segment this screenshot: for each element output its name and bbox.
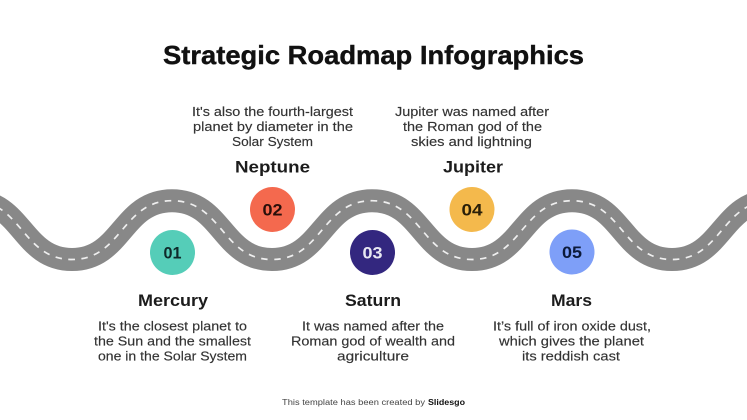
step 02: Neptune	[192, 104, 353, 232]
badge 04: 04	[462, 200, 483, 220]
step 04: Jupiter	[395, 104, 550, 232]
heading Neptune: Neptune	[235, 158, 310, 176]
badge 01	[150, 230, 195, 275]
heading Jupiter: Jupiter	[443, 158, 503, 176]
description Jupiter: Jupiter was named after	[395, 104, 550, 119]
description Saturn: It was named after the	[302, 318, 444, 334]
description Jupiter	[395, 104, 550, 149]
description Neptune: planet by diameter in the	[193, 119, 353, 134]
description Mercury	[94, 318, 251, 364]
description Mars: It’s full of iron oxide dust,	[493, 318, 651, 334]
description Neptune: It's also the fourth-largest	[192, 104, 353, 119]
footer credit: This template has been created by	[282, 398, 425, 407]
description Mars: which gives the planet	[498, 334, 644, 348]
step 01: Mercury	[94, 230, 251, 364]
badge 03: 03	[362, 244, 382, 262]
badge 05: 05	[562, 243, 582, 262]
title: Strategic Roadmap Infographics	[163, 40, 584, 70]
badge 02	[250, 187, 295, 232]
footer credit	[282, 398, 465, 407]
step 05: Mars	[493, 230, 651, 364]
badge 05	[550, 230, 594, 274]
description Mars: its reddish cast	[522, 348, 620, 364]
description Jupiter: the Roman god of the	[403, 119, 542, 134]
description Saturn: agriculture	[337, 348, 409, 364]
badge 03	[350, 230, 395, 275]
description Saturn	[291, 318, 455, 364]
description Saturn: Roman god of wealth and	[291, 334, 455, 348]
footer credit: Slidesgo	[428, 398, 465, 407]
badge 04	[450, 187, 494, 232]
heading Mars: Mars	[551, 291, 592, 310]
description Jupiter: skies and lightning	[411, 134, 532, 149]
description Mercury: It's the closest planet to	[98, 318, 247, 334]
description Neptune: Solar System	[232, 134, 313, 149]
description Mercury: one in the Solar System	[98, 348, 247, 364]
badge 01: 01	[164, 244, 182, 262]
winding road	[0, 201, 747, 260]
description Mars	[493, 318, 651, 364]
badge 02: 02	[262, 200, 282, 220]
heading Saturn: Saturn	[345, 291, 401, 310]
description Neptune	[192, 104, 353, 149]
description Mercury: the Sun and the smallest	[94, 334, 251, 348]
heading Mercury: Mercury	[138, 291, 209, 310]
step 03: Saturn	[291, 230, 455, 364]
